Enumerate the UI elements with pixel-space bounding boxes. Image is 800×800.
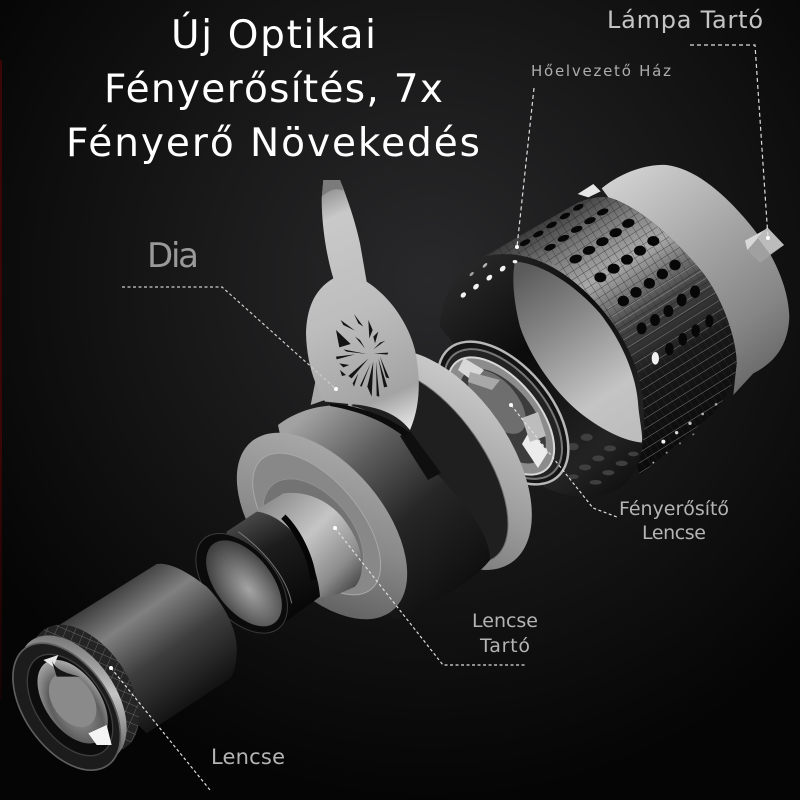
leader line: lens holder: [335, 528, 526, 665]
silver neck: [253, 493, 362, 598]
leader line: heat housing: [517, 88, 534, 247]
front flange disc: [204, 402, 440, 650]
label: Dia: Dia: [147, 236, 199, 276]
sleeve groove: [283, 517, 313, 580]
rim inner: [10, 639, 130, 771]
slide gobo: [306, 180, 419, 437]
white clip: [578, 184, 601, 197]
threaded seat: [243, 460, 383, 606]
back wall disc: [513, 262, 642, 443]
label: Hőelvezető Ház: Hőelvezető Ház: [531, 62, 671, 80]
label: Lencse Tartó: Tartó: [479, 635, 530, 657]
lamp holder tab: [745, 227, 784, 263]
perforation holes: [519, 203, 713, 355]
label: Lencse Tartó: Lencse: [472, 610, 538, 632]
housing exterior band: [483, 197, 737, 475]
label: Fényerősítő Lencse: Fényerősítő: [619, 498, 729, 520]
dark sleeve: [227, 512, 320, 623]
title: Fényerősítés, 7x: [104, 67, 443, 112]
front lens glass: [23, 647, 122, 756]
tube body: [57, 564, 237, 733]
starburst gobo pattern: [336, 314, 389, 397]
title: Fényerő Növekedés: [66, 121, 480, 166]
front rim: [0, 624, 142, 790]
housing interior: [440, 254, 644, 497]
leader line: brightness lens: [511, 405, 617, 517]
front flange and neck: [178, 402, 440, 650]
slide shadow: [330, 403, 408, 437]
sleeve lens rim: [178, 517, 305, 650]
leader line: slide: [122, 287, 336, 389]
leader line: lamp holder: [690, 45, 768, 238]
light dots through housing: [460, 260, 717, 464]
handle shadow: [322, 180, 343, 197]
knurled band: [9, 605, 161, 772]
lens holder dark body: [278, 405, 490, 620]
title: [66, 11, 480, 166]
slide back tab: [311, 382, 325, 405]
label: Lencse: Lencse: [211, 745, 285, 769]
label: Fényerősítő Lencse: [619, 498, 729, 544]
leader dots: [109, 236, 770, 670]
rear lens-holder flange: [311, 317, 569, 603]
leader line: lens: [111, 668, 210, 790]
rear silver cylinder: [602, 165, 789, 395]
slot in body: [400, 431, 441, 480]
title: Új Optikai: [171, 11, 376, 58]
interior perforations: [568, 434, 639, 485]
flange inner ring: [229, 431, 404, 617]
brightness-enhancing lens: [412, 318, 594, 508]
lens highlights: [88, 725, 112, 745]
band grid: [486, 197, 736, 474]
front lens tube: [0, 564, 237, 790]
silver collar: [0, 616, 149, 782]
slide blade and handle: [306, 180, 419, 430]
label: Fényerősítő Lencse: Lencse: [642, 522, 706, 544]
sleeve lens glass: [191, 527, 297, 640]
heat-dissipating housing and lamp holder: [440, 165, 789, 497]
label: Lencse Tartó: [472, 610, 538, 657]
label: Lámpa Tartó: Lámpa Tartó: [607, 6, 763, 34]
